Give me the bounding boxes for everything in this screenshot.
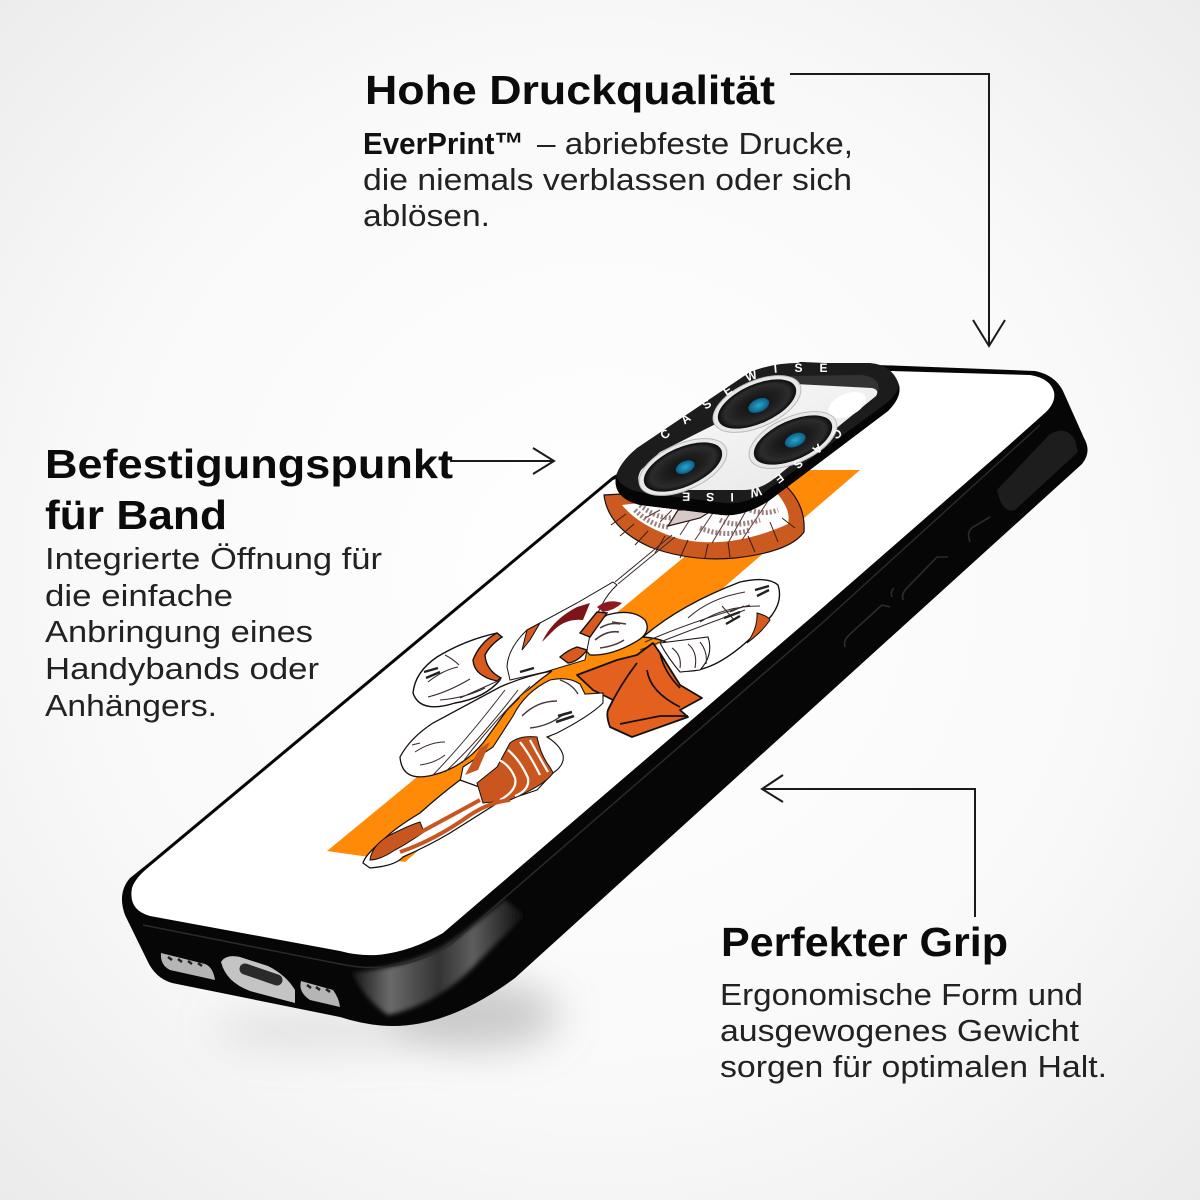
orange bar (327, 470, 860, 862)
text block: print quality: – abriebfeste Drucke, (537, 126, 853, 161)
text block: strap attachment: Anbringung eines (45, 614, 313, 649)
camera bump (616, 362, 900, 516)
lower left sleeve pattern (412, 686, 530, 775)
umbrella handle (615, 535, 675, 584)
text block: print quality: ablösen. (363, 198, 490, 233)
screen back (131, 371, 1054, 955)
printed artwork (327, 470, 860, 868)
arrow: strap attachment (450, 448, 554, 474)
orange robe (577, 643, 702, 737)
right sleeve pleats (660, 637, 710, 672)
lens recess (790, 375, 879, 392)
robe folds (608, 653, 688, 724)
heading: print quality: Hohe Druckqualität (365, 67, 775, 113)
upper body sleeve (507, 582, 617, 680)
bump lower edge (616, 385, 900, 515)
bump frame (616, 363, 900, 515)
side grip panel (997, 431, 1078, 511)
camera glass (638, 384, 877, 490)
phone case (122, 362, 1088, 1026)
heading: perfect grip: Perfekter Grip (721, 919, 1008, 965)
left sleeve pattern (428, 655, 500, 700)
right sleeve ink clusters (724, 586, 769, 624)
left body band (465, 742, 490, 775)
hair (542, 603, 590, 642)
heading: strap attachment: Befestigungspunkt (45, 441, 453, 487)
right sleeve lining (747, 613, 770, 643)
bottom corner sheen (352, 900, 525, 1015)
case body (122, 362, 1088, 1026)
text block: strap attachment (45, 541, 382, 723)
brand text bottom: CASEWISE (682, 430, 842, 502)
wavy brown bands (477, 737, 553, 803)
heading: strap attachment (45, 441, 453, 538)
lens left (631, 427, 735, 507)
text block: strap attachment: die einfache (45, 578, 233, 613)
speaker left (161, 953, 215, 980)
right sleeve pattern (640, 592, 760, 668)
frame highlight (143, 425, 1040, 968)
collar (560, 647, 587, 663)
left sleeve ink cluster (424, 668, 534, 678)
face (550, 622, 583, 650)
text block: perfect grip (720, 977, 1107, 1084)
umbrella (604, 485, 804, 559)
orange obi stripe (510, 670, 577, 720)
tail band (370, 822, 424, 860)
hem bands (400, 800, 510, 852)
text block: print quality: die niemals verblassen oder sich (363, 162, 852, 197)
speaker right (300, 981, 340, 1007)
arrow: perfect grip (762, 775, 975, 917)
lens right (741, 400, 845, 480)
text block: print quality: EverPrint™ (363, 126, 524, 161)
text block: strap attachment: Integrierte Öffnung für (45, 541, 382, 576)
text block: perfect grip: sorgen für optimalen Halt. (720, 1049, 1107, 1084)
heading: strap attachment: für Band (45, 492, 227, 538)
upper cuff (580, 612, 607, 637)
arrow: print quality (790, 74, 1005, 346)
left upper sleeve (413, 633, 502, 707)
text block: print quality (363, 126, 853, 233)
text block: strap attachment: Handybands oder (45, 651, 319, 686)
body pattern (522, 680, 578, 728)
phone shadow (210, 981, 560, 1050)
left sleeve lining (473, 633, 502, 681)
lower dress (363, 780, 507, 868)
white wave lines (499, 740, 548, 800)
charging port (221, 956, 295, 1003)
red fan (597, 601, 622, 612)
brand text top: CASEWISE (660, 364, 828, 438)
central body (460, 679, 603, 800)
text block: perfect grip: Ergonomische Form und (720, 977, 1083, 1012)
side buttons (845, 517, 990, 647)
flash (824, 387, 870, 423)
lens top (705, 364, 809, 444)
round sleeve pattern (595, 622, 626, 648)
right sleeve (643, 580, 780, 671)
round upper sleeve (582, 612, 647, 655)
text block: strap attachment: Anhängers. (45, 688, 217, 723)
shoulder stripe (522, 623, 540, 650)
lower left sleeve (400, 671, 552, 777)
body ink cluster (556, 712, 574, 722)
text block: perfect grip: ausgewogenes Gewicht (720, 1013, 1079, 1048)
